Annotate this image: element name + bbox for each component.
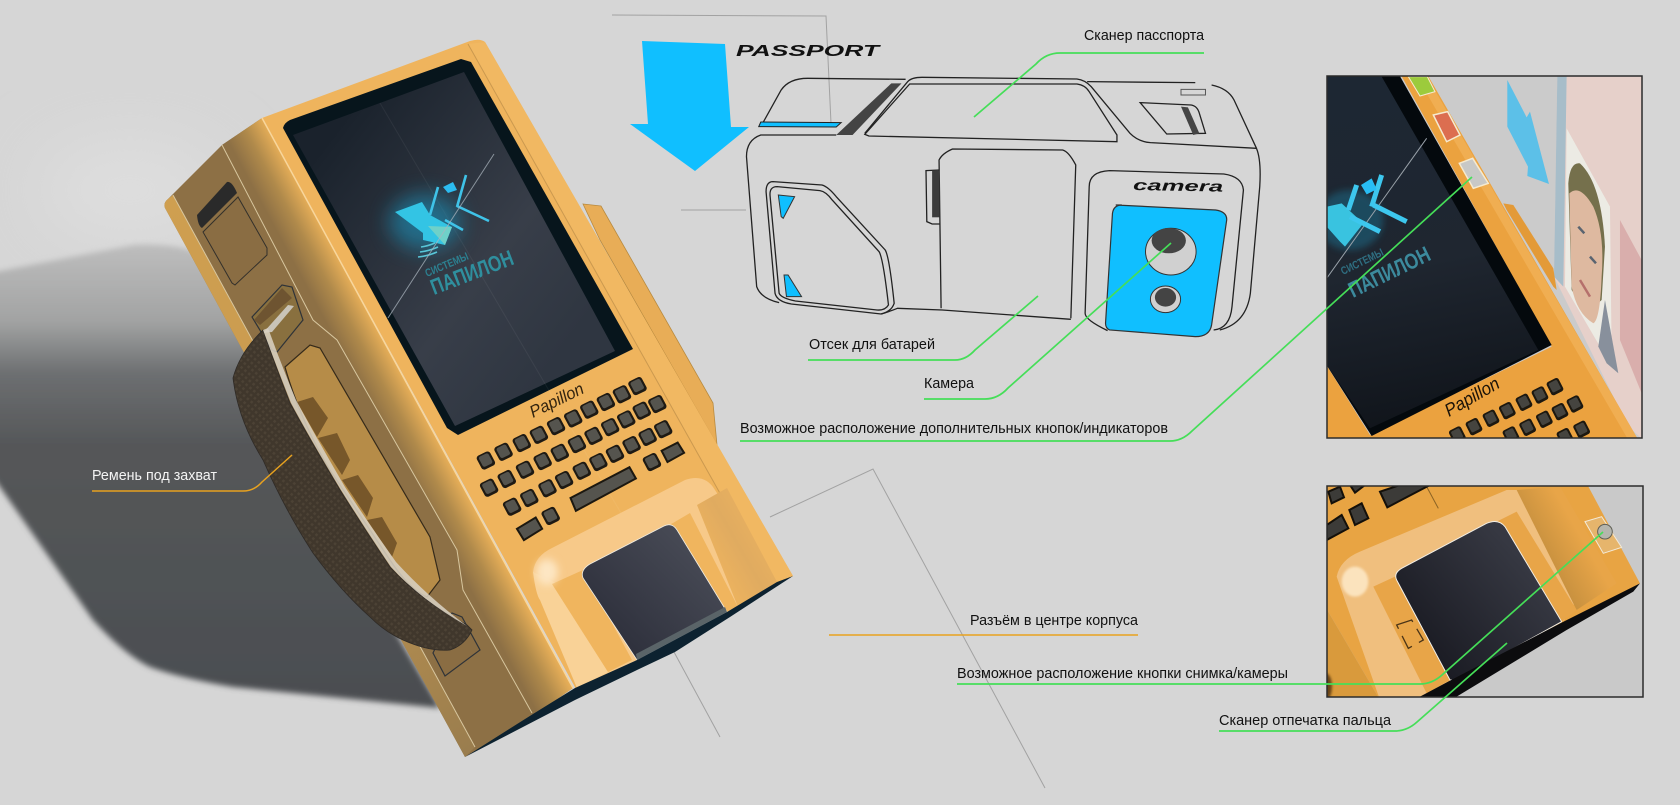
label: central connector: Разъём в центре корпуса	[970, 613, 1139, 629]
big blue arrow	[630, 41, 749, 171]
lower lens	[1150, 286, 1181, 313]
side strap slot lower	[433, 613, 480, 676]
fingerprint sensor button outline	[1397, 620, 1423, 648]
screen logo	[388, 154, 494, 318]
detail panel: indicator buttons and passport	[1317, 73, 1643, 446]
keys crop	[1327, 485, 1430, 540]
detail panel: fingerprint scanner close-up	[1320, 483, 1643, 700]
cast shadow	[0, 245, 440, 708]
panel brand text: Papillon	[1441, 373, 1503, 420]
back clip detail	[1503, 203, 1557, 290]
blue camera plate	[1106, 205, 1227, 337]
construction guide lines	[612, 15, 1045, 788]
side grip recess	[285, 345, 440, 597]
camera heading: camera	[1133, 177, 1223, 196]
side capture button	[1585, 517, 1622, 553]
screen crop	[1323, 73, 1552, 436]
body outline	[746, 77, 1260, 330]
panel frame bottom	[1327, 486, 1643, 697]
screen logo text: systems: СИСТЕМЫ	[423, 251, 471, 280]
small blue arrow	[1507, 80, 1549, 184]
screen logo text: papillon: ПАПИЛОН	[427, 245, 517, 300]
camera housing	[1085, 171, 1243, 331]
label: extra buttons location: Возможное расположение дополнительных кнопок/индикаторов	[740, 421, 1168, 437]
arch around fingerprint scanner	[533, 478, 775, 688]
front face	[262, 40, 793, 689]
passport	[1554, 77, 1643, 440]
panel logo text: papillon: ПАПИЛОН	[1344, 241, 1434, 302]
label: camera	[924, 243, 1171, 399]
side face	[164, 118, 573, 757]
viewfinder	[1140, 89, 1205, 135]
left door	[766, 182, 894, 314]
label: capture button location	[957, 532, 1603, 684]
blue passport slot	[759, 122, 841, 127]
device body crop	[1323, 483, 1640, 700]
scanner window	[865, 84, 1117, 142]
label: fingerprint scanner	[1219, 643, 1507, 731]
bottom dark edge	[465, 576, 793, 757]
device body crop	[1323, 73, 1638, 440]
battery latch	[926, 170, 939, 224]
label: passport scanner: Сканер пасспорта	[1084, 28, 1205, 44]
panel logo text: systems: СИСТЕМЫ	[1339, 247, 1386, 278]
side strap slot upper	[252, 285, 303, 352]
side orange band	[222, 118, 573, 716]
fingerprint scanner	[1396, 521, 1562, 680]
keyboard crop	[1449, 378, 1590, 438]
label: camera: Камера	[924, 376, 975, 392]
side edge strip	[164, 195, 475, 757]
indicator green	[1408, 77, 1435, 96]
label: fingerprint scanner: Сканер отпечатка пальца	[1219, 713, 1392, 729]
screen logo crop	[1317, 138, 1427, 278]
main device illustration	[164, 40, 793, 757]
label: extra buttons location	[740, 177, 1472, 441]
label: capture button location: Возможное расположение кнопки снимка/камеры	[957, 666, 1288, 682]
bottom dark edge	[1420, 583, 1640, 697]
side camera window	[197, 182, 237, 228]
label: strap: Ремень под захват	[92, 468, 217, 484]
side door	[203, 197, 267, 285]
back clip	[583, 204, 717, 445]
panel frame top	[1327, 76, 1642, 438]
keyboard	[476, 376, 684, 540]
right edge band	[468, 42, 793, 586]
battery compartment	[939, 149, 1076, 318]
fingerprint scanner	[582, 525, 727, 660]
PASSPORT heading: PASSPORT	[736, 43, 881, 60]
dark stripe	[836, 83, 902, 135]
indicator grey	[1459, 158, 1488, 188]
label: battery compartment: Отсек для батарей	[809, 337, 935, 353]
label: passport scanner	[974, 28, 1205, 117]
label: strap	[92, 455, 292, 491]
Papillon brand text: Papillon	[526, 379, 587, 422]
line drawing: camera and scanner unit	[746, 77, 1260, 337]
label: battery compartment	[808, 296, 1038, 360]
screen	[283, 59, 633, 435]
carbon hand strap	[233, 328, 472, 650]
upper lens	[1146, 228, 1196, 275]
arch highlight	[1337, 490, 1587, 700]
indicator red	[1433, 112, 1460, 142]
